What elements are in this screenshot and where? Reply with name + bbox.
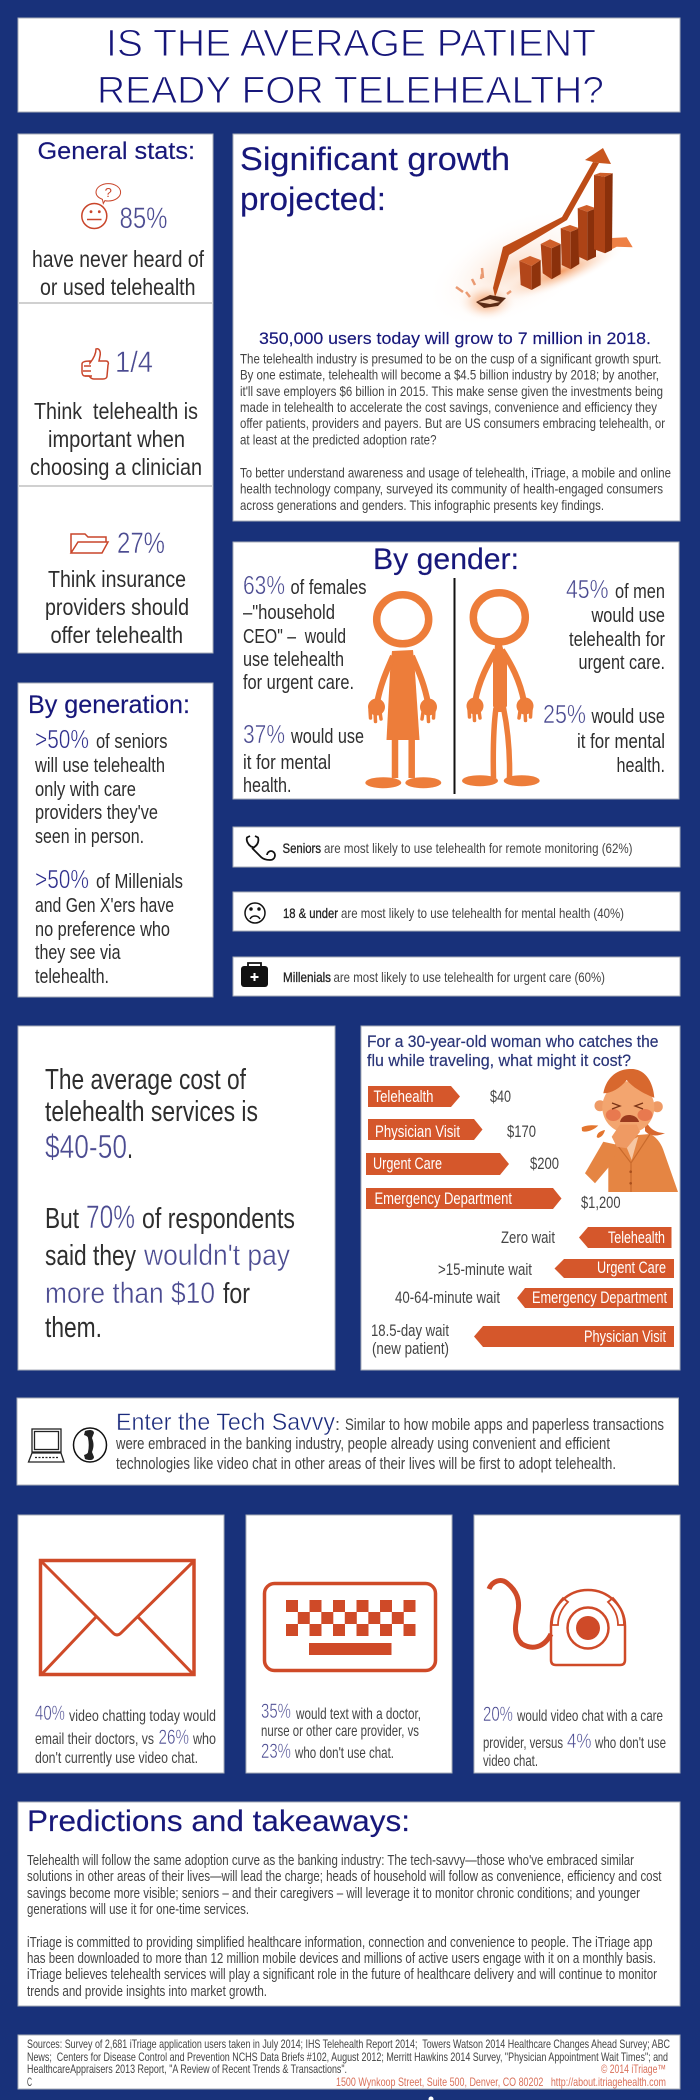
text: cost of services: . xyxy=(127,1128,133,1165)
icon: frown face xyxy=(245,903,265,923)
heading: general stats: General stats: xyxy=(38,138,195,165)
text: texting stat: nurse or other care provider, vs xyxy=(261,1723,419,1740)
icon: male figure xyxy=(462,593,540,786)
icon: keyboard xyxy=(264,1584,436,1670)
subheading: users projection: 350,000 users today will grow to 7 million in 2018. xyxy=(259,329,651,348)
bar: emergency department cost: Emergency Department xyxy=(374,1189,512,1208)
text: texting stat: would text with a doctor, xyxy=(295,1706,421,1723)
text: male stats: health. xyxy=(616,755,665,777)
text: male stats: urgent care. xyxy=(578,652,665,674)
text: 18 and under: are most likely to use telehealth for mental health (40%) xyxy=(341,905,624,921)
text: willingness to pay: for xyxy=(223,1278,250,1310)
text: cost of services: $40-50 xyxy=(45,1128,127,1165)
text: millenials: telehealth. xyxy=(35,966,109,988)
text: female stats: CEO" – would xyxy=(243,626,346,648)
text: seniors xyxy=(34,724,168,848)
bar: emergency department wait xyxy=(395,1288,673,1308)
text: male stats: of men xyxy=(615,581,665,603)
text: seniors: only with care xyxy=(35,779,136,801)
title xyxy=(18,18,680,112)
panel: general stats xyxy=(18,134,213,653)
text: male stats: 45% xyxy=(566,574,608,604)
text: never heard: or used telehealth xyxy=(40,274,196,300)
icon: laptop xyxy=(28,1429,64,1462)
icon: envelope xyxy=(40,1560,194,1675)
heading: flu question xyxy=(367,1032,658,1070)
text: important when choosing: Think telehealth is xyxy=(34,398,198,424)
text: texting stat: 35% xyxy=(261,1700,291,1723)
text: email stat: don't currently use video chat. xyxy=(35,1750,198,1767)
text: seniors: seen in person. xyxy=(35,826,144,848)
text: female stats: 63% xyxy=(243,570,285,600)
text: insurance providers: providers should xyxy=(45,594,189,620)
text: adoption curve: generations will use it for one-time services. xyxy=(27,1902,249,1918)
text: cost of services xyxy=(45,1064,258,1165)
text: millenials: they see via xyxy=(35,942,121,964)
heading: significant growth: Significant growth xyxy=(240,141,510,177)
panel: 18 and under strip xyxy=(233,892,680,931)
panel: significant growth xyxy=(233,134,680,521)
text: adoption curve xyxy=(27,1853,662,1918)
text: millenials: Millenials xyxy=(283,969,331,985)
text: seniors: Seniors xyxy=(282,840,321,856)
heading: significant growth xyxy=(240,141,510,217)
icon: puzzled face: ? xyxy=(105,185,112,200)
text: seniors: will use telehealth xyxy=(34,755,165,777)
text: willingness to pay: 70% xyxy=(86,1199,135,1235)
bar: urgent care cost: $200 xyxy=(530,1154,559,1173)
title: IS THE AVERAGE PATIENT xyxy=(106,23,596,65)
text: sources xyxy=(27,2037,670,2089)
icon: thumbs up xyxy=(82,349,108,379)
icon: folder xyxy=(71,534,108,553)
text: important when choosing: important when xyxy=(48,426,185,452)
text: intro: across generations and genders. This infographic presents key findings. xyxy=(240,497,604,513)
text: seniors: >50% xyxy=(35,724,89,754)
text: sources: HealthcareAppraisers 2013 Report, "A Review of Recent Trends & Transactions". xyxy=(27,2062,347,2076)
title: READY FOR TELEHEALTH? xyxy=(97,70,604,112)
text: male stats: it for mental xyxy=(577,731,665,753)
text: female stats xyxy=(243,570,366,797)
heading: significant growth: projected: xyxy=(240,181,386,217)
text: email stat: 26% xyxy=(158,1726,189,1749)
text: seniors: of seniors xyxy=(96,731,168,753)
text: female stats: of females xyxy=(290,577,366,599)
text: texting stat xyxy=(261,1700,421,1763)
heading: predictions: Predictions and takeaways: xyxy=(27,1805,410,1838)
heading: flu question: For a 30-year-old woman who catches the xyxy=(367,1032,658,1051)
panel: millenials strip xyxy=(233,957,680,996)
text: important when choosing: choosing a clinician xyxy=(30,454,202,480)
stat: 85%: 85% xyxy=(120,202,168,235)
panel: by gender xyxy=(233,542,679,799)
stat: 27%: 27% xyxy=(117,527,165,560)
text: sources: C xyxy=(27,2075,32,2089)
panel: predictions and takeaways xyxy=(18,1802,680,2006)
text: email stat: who xyxy=(192,1731,216,1748)
panel: email card xyxy=(18,1515,224,1773)
bar: urgent care cost xyxy=(366,1153,559,1175)
text: male stats: telehealth for xyxy=(569,629,665,651)
text: important when choosing xyxy=(30,398,202,480)
icon: telephone xyxy=(74,1428,106,1462)
text: male stats: would use xyxy=(591,605,665,627)
heading: by gender: By gender: xyxy=(373,543,519,576)
bar: urgent care wait: Urgent Care xyxy=(597,1258,666,1277)
text: video chat stat: provider, versus xyxy=(483,1735,563,1752)
bar: physician visit wait xyxy=(371,1321,674,1358)
bar: telehealth cost: Telehealth xyxy=(374,1087,434,1106)
text: iTriage commitment: trends and provide insights into market growth. xyxy=(27,1984,267,2000)
text: video chat stat: 20% xyxy=(483,1703,513,1726)
bar: emergency department cost: $1,200 xyxy=(581,1193,620,1212)
text: female stats: 37% xyxy=(243,719,285,749)
panel: sources and footer xyxy=(18,2035,680,2089)
bar: physician visit cost: $170 xyxy=(507,1122,536,1141)
text: willingness to pay: more than $10 xyxy=(45,1277,215,1310)
bar: urgent care cost: Urgent Care xyxy=(373,1154,442,1173)
text: millenials: >50% xyxy=(35,864,89,894)
bar: urgent care wait xyxy=(438,1258,674,1279)
bar: telehealth wait xyxy=(501,1227,672,1248)
panel: video chat card xyxy=(474,1515,680,1773)
panel: by generation xyxy=(18,683,213,997)
text: male stats: would use xyxy=(591,706,665,728)
text: email stat xyxy=(35,1702,216,1767)
text: millenials: and Gen X'ers have xyxy=(35,895,174,917)
text: copyright and address: © 2014 iTriage™ xyxy=(601,2062,666,2076)
text: cost of services: telehealth services is xyxy=(45,1096,258,1128)
bar: emergency department wait: 40-64-minute wait xyxy=(395,1288,500,1307)
text: iTriage commitment xyxy=(27,1935,657,2000)
text: texting stat: 23% xyxy=(261,1740,291,1763)
bar: physician visit wait: Physician Visit xyxy=(584,1327,666,1346)
text: willingness to pay: them. xyxy=(45,1312,102,1344)
bar: physician visit cost xyxy=(368,1119,536,1141)
panel: texting card xyxy=(246,1515,452,1773)
text: millenials: of Millenials xyxy=(96,871,183,893)
bar: physician visit cost: Physician Visit xyxy=(375,1122,460,1141)
text: video chat stat: who don't use xyxy=(594,1735,666,1752)
stat: 1/4: 1/4 xyxy=(115,346,153,379)
illustration: coughing woman xyxy=(582,1069,678,1192)
text: insurance providers xyxy=(45,566,189,648)
heading: flu question: flu while traveling, what might it cost? xyxy=(367,1051,631,1070)
bar: telehealth cost xyxy=(368,1086,511,1107)
text: millenials xyxy=(35,864,183,988)
text: 18 and under: 18 & under xyxy=(283,905,338,921)
text: female stats: health. xyxy=(243,775,292,797)
text: tech savvy: Enter the Tech Savvy xyxy=(116,1409,335,1436)
divider: gender split xyxy=(454,578,456,794)
bar: telehealth wait: Zero wait xyxy=(501,1228,555,1247)
panel: tech savvy xyxy=(17,1398,678,1485)
icon: stethoscope xyxy=(247,836,275,860)
text: millenials: are most likely to use telehealth for urgent care (60%) xyxy=(334,969,605,985)
bar: telehealth cost: $40 xyxy=(490,1087,511,1106)
heading: by generation: By generation: xyxy=(28,691,190,719)
text: male stats xyxy=(543,574,665,777)
text: video chat stat: 4% xyxy=(567,1730,592,1753)
icon: medical bag xyxy=(241,963,268,987)
text: willingness to pay: said they xyxy=(45,1240,136,1272)
icon: webcam xyxy=(489,1581,625,1665)
panel: average cost xyxy=(18,1026,335,1370)
text: willingness to pay: wouldn't pay xyxy=(143,1239,290,1272)
bar: physician visit wait: 18.5-day wait xyxy=(371,1321,449,1340)
text: video chat stat xyxy=(483,1703,666,1770)
text: tech savvy: : xyxy=(335,1415,340,1434)
text: email stat: 40% xyxy=(35,1702,65,1725)
icon: puzzled face xyxy=(82,184,121,228)
chart: rising bars and arrow xyxy=(409,148,633,352)
text: email stat: email their doctors, vs xyxy=(35,1731,154,1748)
panel: flu cost comparison xyxy=(361,1026,680,1370)
text: intro: at least at the predicted adoption rate? xyxy=(240,432,437,448)
text: seniors: providers they've xyxy=(35,802,158,824)
text: willingness to pay: of respondents xyxy=(142,1203,295,1235)
text: intro xyxy=(240,350,671,513)
text: video chat stat: video chat. xyxy=(483,1753,538,1770)
text: texting stat: who don't use chat. xyxy=(294,1745,394,1762)
text: copyright and address xyxy=(336,2062,666,2089)
bar: urgent care wait: >15-minute wait xyxy=(438,1260,532,1279)
bar: telehealth wait: Telehealth xyxy=(608,1228,665,1247)
bar: emergency department cost xyxy=(366,1188,620,1212)
text: female stats: –"household xyxy=(243,602,335,624)
text: email stat: video chatting today would xyxy=(69,1708,216,1725)
text: female stats: use telehealth xyxy=(243,649,344,671)
text: never heard: have never heard of xyxy=(32,246,205,272)
text: cost of services: The average cost of xyxy=(45,1064,247,1096)
text: female stats: for urgent care. xyxy=(243,672,354,694)
text: millenials: no preference who xyxy=(35,919,170,941)
bar: physician visit wait: (new patient) xyxy=(372,1339,449,1358)
text: male stats: 25% xyxy=(543,699,586,729)
text: insurance providers: offer telehealth xyxy=(50,622,183,648)
text: insurance providers: Think insurance xyxy=(48,566,186,592)
text: female stats: would use xyxy=(290,726,364,748)
text: never heard xyxy=(32,246,205,300)
text: tech savvy xyxy=(115,1409,664,1473)
text: willingness to pay xyxy=(45,1199,295,1344)
panel: seniors strip xyxy=(233,827,680,867)
text: willingness to pay: But xyxy=(45,1203,79,1235)
text: seniors: are most likely to use telehealth for remote monitoring (62%) xyxy=(324,840,632,856)
icon: female figure xyxy=(365,595,441,788)
text: female stats: it for mental xyxy=(243,752,331,774)
